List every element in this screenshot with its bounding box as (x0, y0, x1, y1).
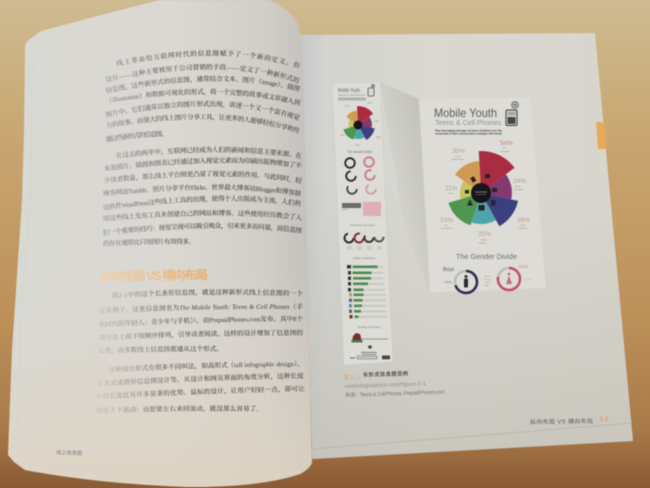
paragraph: tall format advantages (96, 360, 305, 414)
label 11% (445, 185, 458, 195)
gender divide heading: The Gender Divide (456, 252, 517, 261)
left book page (7, 0, 313, 488)
label 33%: Talk (444, 225, 447, 227)
label 25%: 25% (478, 231, 491, 238)
paragraph: opening text: 信息图。这些新形式的信息图，通常结合文本、图片（image）、插图 (106, 75, 301, 94)
paragraph: rise of visual content: 用这些线上发布工具来创建自己的网站和博客。这些使用经历教会了人 (103, 209, 302, 222)
paragraph: opening text: （illustration）和数据可视化的形式，将一个完整的故事或文章融入到 (109, 88, 301, 106)
label 38%: Call on (520, 225, 526, 227)
strip grey boxes (347, 246, 382, 250)
paragraph: rise of visual content: 在过去的两年中，互联网已经成为人们的新闻和信息主要来源。在 (116, 146, 302, 159)
label 25%: networks (478, 242, 486, 244)
strip footer bar (350, 356, 390, 359)
paragraph: tall format advantages: 这种设计形式有很多不同叫法，如高形式（tall infographic design）、 (109, 360, 300, 372)
paragraph: tall format advantages: 滑轮上下滚动；而想要左右来回滚动，就没那么容易了。 (96, 404, 259, 414)
girls donut: Girls (519, 264, 529, 269)
center note between donuts: girls (485, 285, 489, 287)
strip percent labels: 24% (374, 120, 380, 123)
label 25%: Social (481, 240, 487, 242)
panel title: Text messaging averages at teens evidence it as the (435, 130, 503, 132)
segment: email 11% (460, 181, 481, 199)
right page footer: 纵向布局 VS 横向布局 (530, 417, 593, 426)
paragraph: the example infographic: 完美例子。这张信息图名为The Mobile Youth: Teens & Cell Phones（手 (100, 303, 303, 314)
label 25% (478, 231, 491, 244)
strip car illustration (352, 333, 388, 342)
left page footer: 线上信息图 (56, 448, 82, 457)
label 33%: Face-to-Face (441, 227, 452, 230)
label 11%: 11% (445, 185, 458, 192)
strip percent labels: 38% (376, 136, 382, 139)
label 38%: Cell Phone (518, 228, 527, 230)
segment: talk face-to-face 33% (448, 193, 481, 225)
label 33%: 33% (440, 217, 453, 224)
enlarged infographic panel (419, 97, 546, 293)
figure caption: 来源：Teens & Cell Phones, PrepaidPhones.com (345, 387, 446, 399)
label 54% (500, 140, 513, 153)
label 30%: Call on (455, 156, 461, 158)
label 38% (517, 217, 530, 230)
strip percent labels: 54% (367, 102, 373, 105)
panel title (434, 106, 503, 136)
strip cyber features heading: Cyber Features (353, 256, 376, 260)
paragraph: opening text: 图片中。它们通常以独立的图片形式出现，讲述一个又一个富有视觉 (105, 100, 300, 121)
segment: landline 30% (455, 161, 481, 193)
center note between donuts (484, 276, 492, 287)
paragraph: rise of visual content: 设软件WordPress这些线上工具的出现，使得个人出版成为主流。人们利 (103, 194, 302, 210)
label 54%: text (503, 146, 507, 150)
strip gender donuts (345, 157, 376, 194)
paragraph: tall format advantages: 计的长宽比有许多显著的优势。鼠标的设计，让用户轻轻一点，即可让 (97, 385, 305, 399)
center note between donuts: texts per (484, 278, 492, 281)
strip source logo (361, 345, 377, 355)
boys donut: Boys (443, 267, 455, 273)
label 30%: Landline Phone (451, 159, 464, 161)
paragraph: the example infographic: 长度，而多数线上信息图都遵从这个形式。 (99, 345, 219, 354)
segment: social networks 25% (471, 193, 496, 224)
strip percent labels: 33% (340, 134, 346, 137)
center note between donuts: Mean (485, 276, 490, 278)
label 24% (513, 178, 526, 191)
right page footer: 53 (600, 417, 609, 423)
strip gender heading: The Gender Divide (347, 150, 372, 154)
paragraph: opening text (105, 49, 301, 142)
figure caption: 图2-1 (344, 375, 360, 381)
paragraph: the example infographic (99, 288, 304, 354)
paragraph: rise of visual content: 的存在通常比只用图片有效得多。 (102, 238, 191, 246)
paragraph: the example infographic: 部分自上而下按顺序排列，引导读者阅读。这样的设计增加了信息图的 (100, 329, 304, 340)
strip title (338, 88, 366, 100)
strip percent labels: 30% (345, 105, 351, 108)
icon: cell phone with signal (506, 101, 519, 126)
paragraph: opening text: 设计——这种主要被用于公司营销的手段——定义了一种新形式的 (106, 63, 300, 84)
paragraph: rise of visual content: 来说照片、插图和图表已经通过加入视觉元素而为印刷出版物增加了不 (104, 156, 302, 172)
paragraph: opening text: 线上革命给互联网时代的信息图赋予了一个新的定义。但 (116, 49, 300, 69)
boys donut (443, 267, 477, 293)
strip green bar chart (347, 265, 387, 318)
panel title: cornerstone of their communication strategies with friends (435, 132, 503, 136)
figure caption (344, 369, 446, 399)
paragraph: rise of visual content: 少读者数量，那么线上平台则更凸显了视觉元素的作用。与此同时，轻 (104, 170, 302, 184)
center note between donuts: a day (485, 282, 490, 284)
page block edge highlight (16, 60, 33, 440)
paragraph: rise of visual content (102, 146, 302, 246)
segment icons (465, 174, 497, 210)
paragraph: rise of visual content: 们一个重要的技巧：视觉呈现可以吸引观众，引来更多访问量，而信息图 (103, 222, 302, 236)
label 54%: messaging (500, 151, 510, 153)
right page footer (313, 417, 632, 449)
panel title: Teens & Cell Phones (435, 118, 501, 127)
paragraph: opening text: 力的故事。而强大的线上图片分享工具，让更多的人能够轻松分享和传 (106, 113, 300, 134)
strip phone icon (368, 84, 375, 96)
strip donut row (344, 232, 384, 242)
strip title: Mobile Youth (338, 88, 360, 94)
left page footer (13, 447, 312, 469)
shadow wedge between strip and enlarged panel (380, 82, 430, 293)
strip radial chart (343, 106, 375, 140)
percentage labels (440, 140, 530, 244)
strip dot grids (342, 202, 381, 216)
paragraph: the example infographic: 机时代的年轻人：青少年与手机》），由PrepaidPhones.com发布。其中8个 (100, 315, 303, 327)
paragraph: rise of visual content: 博客网站Tumblr、照片分享平台Flickr、世界最大博客站Blogger和博客制 (103, 184, 302, 197)
strip texting content heading: Texting Content (350, 223, 375, 227)
paragraph: opening text: 播这些新形式的信息图。 (106, 130, 164, 142)
label 24%: messaging (514, 189, 523, 191)
panel title: Mobile Youth (434, 106, 497, 120)
label 30% (451, 148, 465, 161)
girls donut: 77% (524, 278, 532, 282)
strip percent labels (340, 102, 382, 147)
figure caption: 长形式信息图范例 (363, 369, 408, 378)
label 24%: instant (515, 185, 521, 188)
segment: instant messaging 24% (481, 174, 512, 199)
orange thumb tab (596, 122, 606, 149)
section heading: 纵向布局 VS 横向布局 (100, 267, 208, 284)
center hub (471, 183, 491, 203)
paragraph: the example infographic: 图2-1中的这个长条形信息图，就是这种新形式线上信息图的一个 (112, 288, 303, 298)
right book page (300, 33, 633, 459)
segment: text messaging 54% (479, 151, 514, 193)
label 11%: email (448, 193, 453, 195)
label 24%: 24% (513, 178, 526, 185)
radial segment chart (448, 151, 518, 226)
strip percent labels: 25% (355, 144, 361, 147)
left page footer: 62 (44, 449, 50, 455)
girls donut (498, 264, 532, 290)
figure caption: coolinfographics.com/figure-2-1 (345, 381, 426, 390)
strip texting and driving heading: Texting & Driving (357, 325, 380, 329)
label 33% (440, 217, 453, 230)
label 54%: 54% (500, 140, 513, 147)
paragraph: tall format advantages: 长条式或塔形信息图设计等。从设计和网页界面的角度分析，这种长度 (98, 372, 304, 386)
strip title: Teens & Cell Phones (338, 93, 365, 97)
infographic thumbnail strip (332, 82, 393, 365)
segment: call on cell 38% (481, 193, 518, 226)
label 38%: 38% (517, 217, 530, 224)
boys donut: 74% (444, 280, 452, 284)
label 30%: 30% (452, 148, 465, 155)
